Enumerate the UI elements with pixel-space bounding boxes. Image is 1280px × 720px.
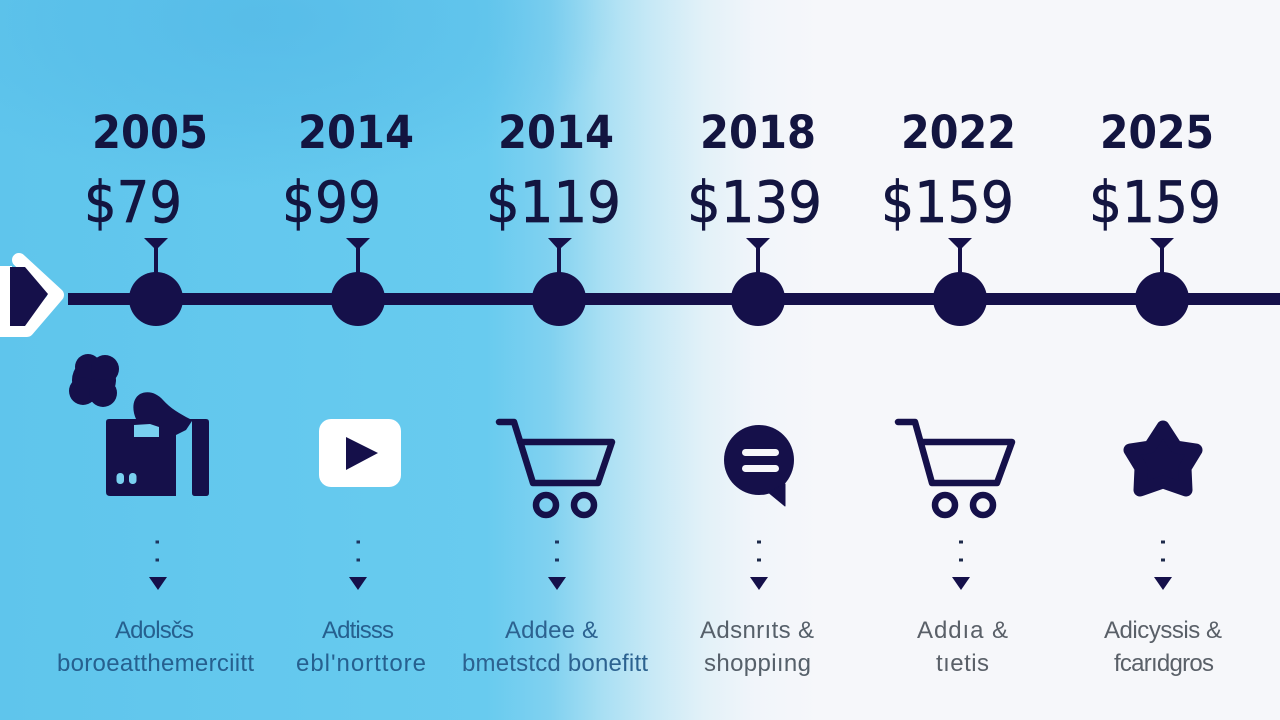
icon: shopping cart bbox=[499, 422, 612, 515]
label 3 bbox=[462, 617, 648, 677]
label 5 bbox=[917, 617, 1008, 677]
node 2005 bbox=[129, 238, 183, 326]
timeline axis bbox=[68, 293, 1280, 305]
arrow 6 bbox=[1154, 540, 1172, 590]
icon: shopping cart second bbox=[898, 422, 1012, 515]
arrow 2 bbox=[349, 540, 367, 590]
label 4: shoppiıng bbox=[704, 650, 811, 677]
price labels: $119 bbox=[486, 170, 621, 236]
year labels: 2022 bbox=[901, 106, 1016, 159]
icon: star bbox=[1130, 427, 1196, 490]
label 2: ebl'norttore bbox=[296, 650, 426, 677]
label 1: Adolsčs bbox=[115, 617, 194, 644]
node 2025 bbox=[1135, 238, 1189, 326]
node 2014 bbox=[331, 238, 385, 326]
label 3: bmetstcd bonefitt bbox=[462, 650, 648, 677]
label 6: fcarıdgros bbox=[1114, 650, 1214, 677]
arrow 4 bbox=[750, 540, 768, 590]
label 3: Addee & bbox=[505, 617, 598, 644]
arrow 5 bbox=[952, 540, 970, 590]
label 5: tıetis bbox=[936, 650, 989, 677]
arrow 1 bbox=[149, 540, 167, 590]
price labels: $159 bbox=[881, 170, 1014, 236]
icon: play button bbox=[319, 419, 401, 487]
year labels: 2018 bbox=[700, 106, 816, 159]
label 1: boroeatthemerciitt bbox=[57, 650, 254, 677]
label 6 bbox=[1104, 617, 1222, 677]
label 4: Adsnrıts & bbox=[700, 617, 814, 644]
label 1 bbox=[57, 617, 254, 677]
label 4 bbox=[700, 617, 814, 677]
icon: chat bubble bbox=[724, 425, 794, 506]
label 2: Adtisss bbox=[322, 617, 394, 644]
price labels bbox=[84, 170, 1221, 236]
year labels: 2014 bbox=[498, 106, 614, 159]
benefit labels bbox=[57, 617, 1222, 677]
icon: box with blobs bbox=[69, 354, 209, 496]
label 6: Adicyssis & bbox=[1104, 617, 1222, 644]
node 2022 bbox=[933, 238, 987, 326]
label 5: Addıa & bbox=[917, 617, 1008, 644]
dotted arrows bbox=[149, 540, 1172, 590]
price labels: $139 bbox=[687, 170, 822, 236]
node 2018 bbox=[731, 238, 785, 326]
node 2014 second bbox=[532, 238, 586, 326]
year labels: 2005 bbox=[92, 106, 208, 159]
icon: timeline start arrow bbox=[0, 260, 57, 336]
arrow 3 bbox=[548, 540, 566, 590]
year labels: 2025 bbox=[1100, 106, 1214, 159]
year labels: 2014 bbox=[298, 106, 414, 159]
price labels: $79 bbox=[84, 170, 182, 236]
price labels: $159 bbox=[1089, 170, 1221, 236]
price labels: $99 bbox=[282, 170, 381, 236]
timeline nodes bbox=[129, 238, 1189, 326]
year labels bbox=[92, 106, 1214, 159]
label 2 bbox=[296, 617, 426, 677]
